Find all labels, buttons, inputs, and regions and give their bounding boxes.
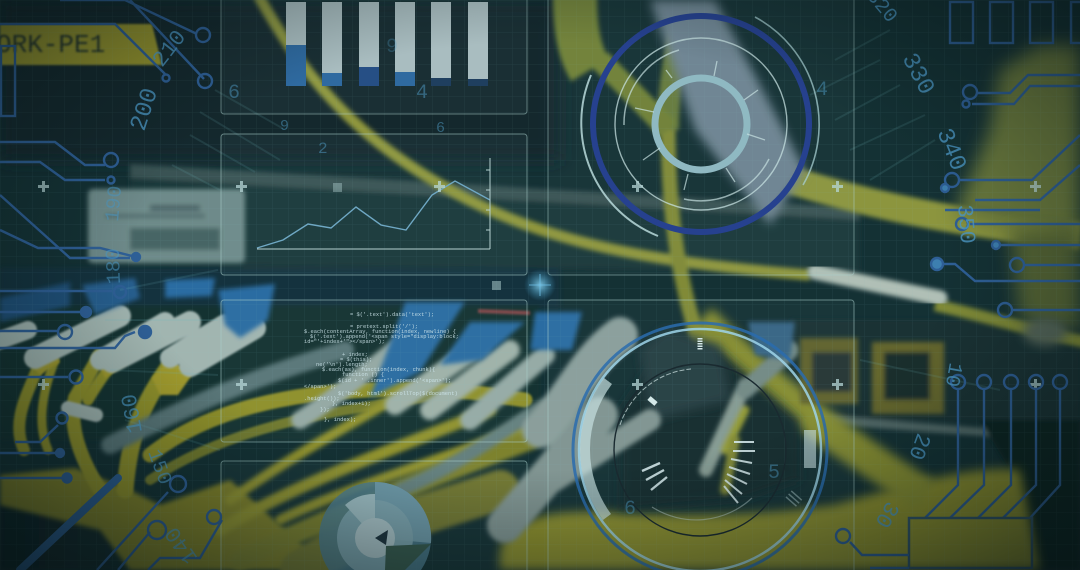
rotated scale numbers: 190: [102, 185, 128, 223]
code text: [304, 312, 459, 423]
rotated scale numbers: 160: [117, 392, 149, 435]
gauge left ticks: [642, 463, 667, 490]
yellow connector boots: [28, 348, 192, 395]
yellow band into bundle: [700, 320, 925, 495]
white cable with yellow sleeve: [815, 272, 940, 298]
rotated scale numbers: 200: [126, 85, 165, 134]
rotated scale numbers: 30: [869, 496, 904, 532]
dark blob top of gauge: [640, 328, 730, 420]
rotated scale numbers: 150: [141, 447, 175, 488]
left yellow bundles: [0, 468, 330, 570]
rotated scale numbers: 350: [951, 203, 979, 245]
scattered panel digits: 4: [816, 79, 828, 102]
blue connectors: [0, 278, 795, 398]
code text: });: [320, 407, 330, 413]
dark upper band: [0, 0, 560, 160]
scattered panel digits: [228, 36, 828, 521]
code text: $('body, html').scrollTop($(document): [338, 391, 458, 397]
code text: id="'+index+'"></span>');: [304, 339, 385, 345]
code text: .height());: [304, 396, 340, 402]
yellow cables far: [258, 0, 1080, 345]
line chart: [257, 181, 490, 248]
code text: + index;: [342, 352, 368, 358]
traces: top left: [0, 0, 204, 79]
rotated scale numbers: 140: [161, 522, 204, 568]
scattered panel digits: 5: [768, 462, 780, 485]
device label: [88, 189, 245, 263]
code text: </span>');: [304, 384, 336, 390]
panel: top right frame: [548, 0, 854, 275]
dial: bottom gauge: [573, 323, 827, 570]
traces: right side: [972, 75, 1080, 104]
code text: = pretext.split('/');: [350, 324, 418, 330]
scattered panel digits: 6: [624, 498, 636, 521]
code text: = $(this);: [340, 357, 372, 363]
scattered panel digits: 6: [436, 120, 445, 137]
rotated scale numbers: 180: [103, 248, 127, 285]
scattered panel digits: 9: [386, 36, 398, 59]
centre glow marker: [524, 269, 556, 301]
thick blue bar: [20, 478, 118, 570]
scattered panel digits: 4: [416, 82, 428, 105]
panel: code listing: [221, 300, 527, 442]
code text: ne('\n').length;: [316, 362, 368, 368]
white cable behind radar: [650, 0, 805, 225]
scattered panel digits: 2: [318, 140, 328, 158]
rotated scale numbers: 10: [939, 361, 966, 388]
rack shelf band: [0, 164, 1080, 570]
code text: $('.text').append('<span style="display:block;: [310, 334, 459, 340]
right yellow bundle: [955, 45, 1080, 240]
code text: $.each(contentArray, function(index, newline) {: [304, 329, 456, 335]
rotated scale numbers: 330: [895, 49, 939, 100]
gauge dark hole in photo: [620, 350, 800, 510]
white fibre cables: [0, 316, 255, 415]
traces: bottom right bus: [925, 390, 1060, 518]
panel: line chart: [221, 134, 527, 275]
radial dial tick lines: [105, 30, 1000, 450]
right background fade: [1010, 230, 1080, 330]
blurred middle white cables: [110, 330, 790, 525]
radar spokes: [635, 61, 765, 190]
code text: = $('.text').data('text');: [350, 312, 434, 318]
bottom yellow bundle: [499, 469, 1040, 570]
rotated scale numbers: 20: [902, 430, 935, 463]
dial: top radar: [581, 16, 819, 236]
code text: function () {: [342, 372, 384, 378]
gray blur at cable crossing: [1023, 318, 1067, 346]
plus markers: [38, 181, 1041, 390]
panel: top bar chart: [221, 0, 527, 114]
code text: $.each(as), function(index, chunk){: [322, 367, 435, 373]
code text: $(id + ' .inner').append('<span>');: [338, 378, 451, 384]
traces: left side: [0, 142, 140, 258]
traces: top right boxes: [950, 2, 973, 43]
chart axes: [257, 158, 490, 249]
yellow tag: [0, 24, 162, 65]
panel: bottom left pie chart: [221, 461, 527, 570]
scattered panel digits: 6: [228, 82, 240, 105]
rotated scale numbers: 210: [148, 26, 192, 72]
rotated scale numbers: 340: [930, 125, 971, 175]
scattered panel digits: 9: [280, 118, 289, 135]
red connector strip: [478, 309, 530, 315]
bar chart columns: [286, 2, 488, 86]
code text: }, index+1);: [332, 401, 371, 407]
code text: }, index);: [324, 417, 356, 423]
panel: bottom right frame: [548, 300, 854, 570]
radial pie: [319, 482, 431, 570]
brass ports: [800, 338, 944, 414]
gauge right tick fan: [724, 442, 755, 503]
